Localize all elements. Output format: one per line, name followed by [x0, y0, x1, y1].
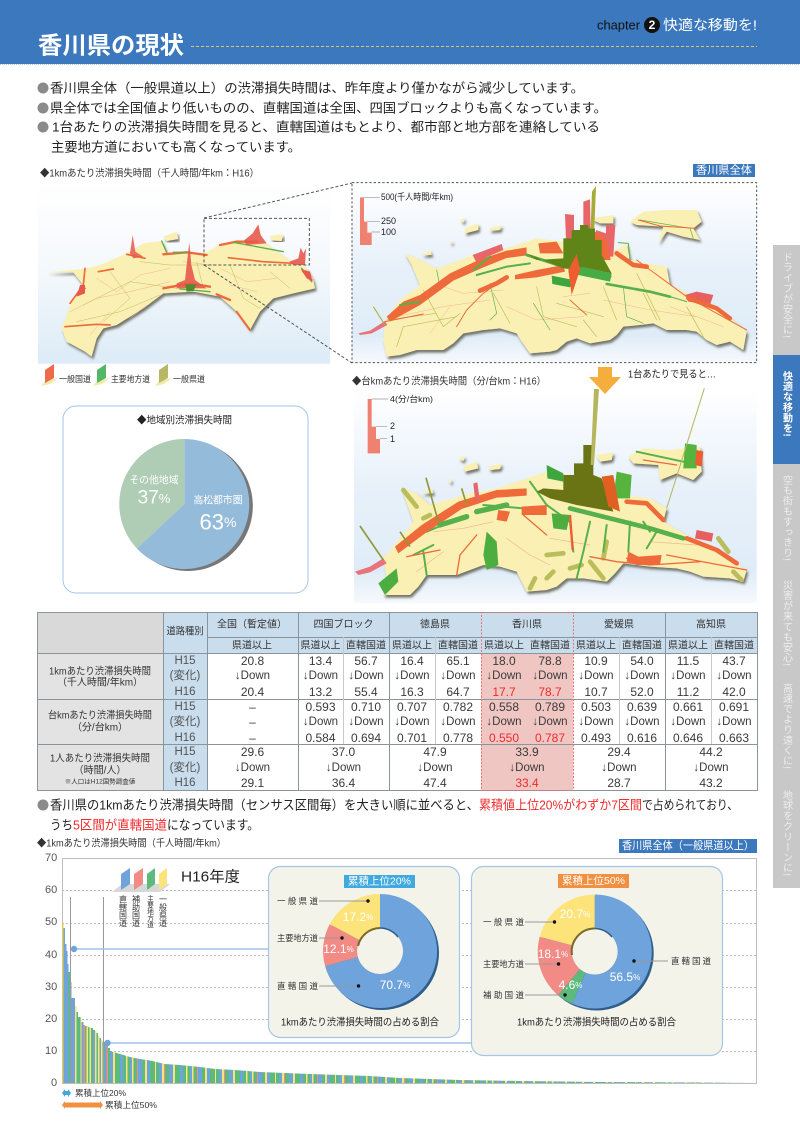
values per km: 13.4 [309, 654, 333, 668]
values per km: 11.5 [677, 654, 700, 668]
row headers: （分/台km） [72, 720, 128, 734]
column headers: 県道以上 [668, 638, 708, 652]
axis labels: 60 [45, 884, 57, 896]
donut chart: 20.7% [560, 907, 590, 921]
scale labels: vehicle map: 2 [390, 421, 395, 431]
bar chart [45, 852, 756, 1089]
column headers: 直轄国道 [714, 638, 754, 652]
axis labels: 70 [45, 852, 57, 864]
tab labels [780, 252, 792, 876]
intro bullet text [38, 80, 607, 154]
map heading: vehicle km: ◆台kmあたり渋滞損失時間（分/台km：H16） [352, 374, 546, 388]
fiscal year label: H16年度 [181, 868, 240, 886]
donut labels: 主要地方道 [277, 933, 318, 943]
donut chart: 56.5% [610, 970, 640, 984]
leader: top 50% [104, 1040, 471, 1046]
column headers: 直轄国道 [530, 638, 570, 652]
title: 香川県の現状 [38, 32, 184, 60]
column headers: 徳島県 [420, 618, 450, 630]
pie chart: その他地域 [130, 474, 178, 486]
range marker: top 50%: 累積上位50% [105, 1100, 157, 1110]
tab labels: 空も街もすっきり! [780, 475, 792, 561]
side navigation tabs [773, 245, 800, 888]
values per vehicle km: ↓Down [624, 716, 660, 728]
tab labels: 高速でより遠くに! [780, 682, 792, 769]
values per vehicle km: 0.616 [627, 731, 657, 745]
donut labels: 主要地方道 [483, 959, 524, 969]
ranking summary text: うち [50, 818, 73, 832]
column headers: 直轄国道 [438, 638, 478, 652]
year labels: H16 [174, 777, 196, 789]
donut chart: 12.1% [323, 942, 354, 956]
values per km: ↓Down [624, 670, 660, 682]
year labels: H15 [174, 701, 196, 713]
chart heading: ◆1kmあたり渋滞損失時間（千人時間/年km） [37, 836, 226, 850]
values per km: 20.8 [241, 654, 265, 668]
arrow: down [589, 367, 621, 394]
values per vehicle km: ↓Down [532, 716, 568, 728]
column headers: 愛媛県 [604, 618, 634, 630]
values per vehicle km: 0.707 [397, 700, 427, 714]
values per km: 16.4 [400, 654, 424, 668]
column headers: 四国ブロック [314, 618, 374, 630]
legend: road types: 一般県道 [173, 374, 205, 384]
axis labels: 30 [45, 981, 57, 993]
values per person: 44.2 [699, 745, 723, 759]
values per vehicle km: 0.584 [305, 731, 336, 745]
legend: H16 road classes: 補助国道 [132, 894, 140, 928]
row headers: （時間/人） [74, 764, 126, 776]
panel: regional pie [63, 406, 308, 593]
donut chart: 4.6% [559, 978, 582, 992]
year labels: (変化) [170, 669, 200, 682]
intro bullet text: 県全体では全国値より低いものの、直轄国道は全国、四国ブロックよりも高くなっています。 [50, 100, 607, 116]
axis labels [45, 852, 57, 1089]
values per vehicle km: ↓Down [716, 716, 752, 728]
values per vehicle km: 0.691 [719, 700, 749, 714]
leader: top 20% [71, 946, 268, 952]
values per km: 56.7 [354, 654, 378, 668]
values per person: ↓Down [601, 762, 637, 774]
chapter label: chapter [597, 18, 641, 32]
values per km: 17.7 [492, 685, 516, 699]
donut labels: 補 助 国 道 [483, 990, 524, 1000]
badge: top 50%: 累積上位50% [562, 874, 625, 887]
column headers: 直轄国道 [346, 638, 386, 652]
column headers: 県道以上 [232, 638, 272, 652]
column headers: 県道以上 [484, 638, 524, 652]
donut chart [323, 894, 439, 1010]
column headers: 全国（暫定値） [217, 618, 287, 630]
axis labels: 20 [45, 1013, 57, 1025]
intro bullet text: 1台あたりの渋滞損失時間を見ると、直轄国道はもとより、都市部と地方部を連絡している [52, 120, 600, 134]
scale bar [360, 197, 372, 245]
map: Kagawa per vehicle km [354, 388, 757, 603]
values per km: ↓Down [532, 670, 568, 682]
donut labels: 直 轄 国 道 [277, 981, 318, 991]
values per km: 78.7 [538, 685, 562, 699]
donut caption: 1kmあたり渋滞損失時間の占める割合 [517, 1016, 676, 1028]
year labels: (変化) [170, 715, 200, 728]
legend: road types: 一般国道 [59, 374, 91, 384]
axis labels: 0 [51, 1077, 57, 1089]
donut chart: 17.2% [343, 910, 373, 924]
pie chart: 高松都市圏 [194, 494, 242, 506]
ranking summary text: 累積値上位20%がわずか7区間 [479, 798, 642, 812]
values per person [235, 745, 729, 790]
scale labels: vehicle map: 4(分/台km) [390, 394, 433, 404]
column headers: 直轄国道 [622, 638, 662, 652]
values per person: ↓Down [693, 762, 729, 774]
bars: tallest sections [62, 923, 110, 1083]
header band [0, 0, 800, 64]
badge: top 20%: 累積上位20% [348, 874, 411, 888]
values per person: ↓Down [326, 762, 361, 774]
column headers: 県道以上 [392, 638, 432, 652]
pie chart [119, 439, 253, 571]
values per km: 10.7 [584, 685, 608, 699]
year labels: (変化) [170, 761, 200, 774]
values per person: 47.9 [423, 745, 447, 759]
values per km: 20.4 [241, 685, 265, 699]
badge: prefecture: 香川県全体 [696, 162, 752, 176]
donut chart [538, 894, 654, 1010]
values per km: 54.0 [630, 654, 654, 668]
chapter label: 2 [649, 18, 656, 32]
values per vehicle km: 0.789 [535, 700, 565, 714]
donut labels [483, 917, 711, 1000]
row headers [48, 664, 152, 786]
donut chart: 70.7% [380, 978, 410, 992]
tab labels: 災害が来ても安心! [780, 580, 792, 666]
values per person: ↓Down [417, 762, 453, 774]
values per vehicle km: 0.661 [673, 700, 703, 714]
values per km: ↓Down [348, 670, 384, 682]
values per person: ↓Down [235, 762, 270, 774]
ranking summary text: 香川県の1kmあたり渋滞損失時間（センサス区間毎）を大きい順に並べると、 [50, 798, 479, 812]
values per person: 28.7 [607, 776, 631, 790]
values per person: 33.9 [515, 745, 539, 759]
map: Shikoku overview [38, 183, 330, 364]
donut caption: 1kmあたり渋滞損失時間の占める割合 [281, 1016, 439, 1028]
values per vehicle km: ↓Down [670, 716, 706, 728]
legend: H16 road classes: 主要地方道 [146, 894, 154, 929]
column headers [166, 618, 754, 652]
scale labels: vehicle map [390, 394, 433, 444]
values per person: 43.2 [699, 776, 723, 790]
active tab [773, 355, 800, 464]
values per vehicle km: ↓Down [348, 716, 384, 728]
row headers: （千人時間/年km） [57, 676, 143, 688]
badge: chart scope: 香川県全体（一般県道以上） [622, 838, 754, 852]
year labels [170, 655, 200, 789]
axis labels: 40 [45, 949, 57, 961]
values per vehicle km: ↓Down [394, 716, 430, 728]
values per km: 10.9 [584, 654, 608, 668]
row headers: 1人あたり渋滞損失時間 [50, 752, 150, 764]
donut chart: 18.1% [538, 947, 568, 961]
tab labels: ドライブが安全に! [780, 252, 792, 338]
zoom connector lines [204, 183, 352, 363]
values per km: 43.7 [722, 654, 746, 668]
values per km: 65.1 [446, 654, 470, 668]
ranking summary text: 5区間が直轄国道 [73, 818, 167, 832]
values per km: 18.0 [492, 654, 516, 668]
bars: long tail [110, 1051, 756, 1083]
range marker: top 50% [62, 1100, 157, 1110]
values per vehicle km: 0.593 [305, 700, 336, 714]
pie chart: 37% [138, 488, 171, 508]
values per vehicle km: ↓Down [486, 716, 522, 728]
values per km: 11.2 [677, 685, 700, 699]
column headers: 県道以上 [576, 638, 616, 652]
year labels: H15 [174, 746, 196, 758]
values per km: ↓Down [235, 670, 270, 682]
column headers: 高知県 [696, 618, 726, 630]
values per vehicle km: ↓Down [440, 716, 476, 728]
values per person: 29.4 [607, 745, 631, 759]
values per person: 33.4 [515, 776, 539, 790]
panel: top 20% donut [268, 866, 460, 1038]
values per vehicle km: 0.694 [351, 731, 381, 745]
values per vehicle km: 0.550 [489, 731, 519, 745]
values per vehicle km: 0.503 [581, 700, 611, 714]
intro bullet text: 主要地方道においても高くなっています。 [51, 140, 301, 154]
values per vehicle km: – [249, 731, 256, 745]
row headers: ※人口はH12国勢調査値 [65, 776, 136, 786]
legend: H16 road classes [112, 868, 240, 929]
values per km: ↓Down [670, 670, 706, 682]
values per km [235, 654, 752, 699]
values per km: 42.0 [722, 685, 746, 699]
scale bar [368, 399, 380, 453]
legend: H16 road classes: 直轄国道 [118, 894, 128, 928]
ranking summary text: になっています。 [167, 818, 259, 832]
scale labels: km map: 250 [381, 216, 396, 226]
values per km: 16.3 [400, 685, 424, 699]
values per vehicle km: 0.646 [673, 731, 703, 745]
pie heading: ◆地域別渋滞損失時間 [137, 414, 232, 426]
arrow caption: 1台あたりで見ると… [628, 368, 716, 380]
row headers: 1kmあたり渋滞損失時間 [49, 664, 151, 678]
values per km: ↓Down [716, 670, 752, 682]
column headers: 県道以上 [300, 638, 340, 652]
column headers: 香川県 [512, 618, 542, 630]
values per vehicle km: 0.558 [489, 700, 519, 714]
axis labels: 10 [45, 1045, 57, 1057]
values per person: 37.0 [332, 745, 356, 759]
values per km: 55.4 [354, 685, 378, 699]
scale labels: km map: 500(千人時間/年km) [381, 191, 453, 202]
scale labels: km map: 100 [381, 227, 396, 237]
values per vehicle km: 0.778 [443, 731, 473, 745]
values per vehicle km: ↓Down [578, 716, 614, 728]
tab labels: 地球をクリーンに! [780, 789, 792, 876]
values per km: ↓Down [578, 670, 614, 682]
column headers: 道路種別 [166, 624, 204, 638]
donut labels [277, 896, 370, 991]
ranking summary text: で占められており、 [642, 798, 738, 812]
values per vehicle km: 0.710 [351, 700, 381, 714]
legend: road types: 主要地方道 [111, 374, 150, 384]
year labels: H15 [174, 655, 196, 667]
panel: top 50% donut [472, 866, 722, 1056]
values per km: ↓Down [303, 670, 338, 682]
values per vehicle km: – [249, 700, 256, 714]
values per vehicle km: 0.663 [719, 731, 749, 745]
values per vehicle km: 0.782 [443, 700, 473, 714]
tab labels: 快適な移動を! [780, 370, 792, 437]
values per km: 13.2 [309, 685, 333, 699]
values per km: ↓Down [486, 670, 522, 682]
values per vehicle km: 0.639 [627, 700, 657, 714]
values per vehicle km: ↓Down [303, 716, 338, 728]
scale labels: vehicle map: 1 [390, 434, 395, 444]
map: Kagawa per km [352, 183, 757, 363]
row headers: 台kmあたり渋滞損失時間 [48, 708, 152, 722]
ranking summary text [38, 798, 738, 832]
year labels: H16 [174, 732, 196, 744]
values per vehicle km: 0.493 [581, 731, 611, 745]
values per km: ↓Down [394, 670, 430, 682]
legend: H16 road classes: 一般県道 [158, 895, 168, 928]
values per person: 47.4 [423, 776, 447, 790]
values per vehicle km [249, 700, 752, 745]
values per km: 64.7 [446, 685, 470, 699]
map heading: 1km: ◆1kmあたり渋滞損失時間（千人時間/年km：H16） [40, 166, 259, 180]
range marker: top 20%: 累積上位20% [75, 1088, 126, 1098]
scale labels: km map [381, 191, 453, 237]
values per km: 78.8 [538, 654, 562, 668]
data table [37, 612, 758, 790]
donut labels: 一 般 県 道 [483, 917, 524, 927]
values per person: 29.1 [241, 776, 265, 790]
intro bullet text: 香川県全体（一般県道以上）の渋滞損失時間は、昨年度より僅かながら減少しています。 [50, 80, 584, 96]
chapter label [597, 17, 757, 33]
values per person: ↓Down [509, 762, 545, 774]
axis labels: 50 [45, 916, 57, 928]
donut labels: 直 轄 国 道 [671, 956, 711, 966]
chapter label: 快適な移動を! [663, 17, 757, 33]
values per km: 52.0 [630, 685, 654, 699]
values per person: 36.4 [332, 776, 356, 790]
legend: road types [41, 364, 205, 386]
values per km: ↓Down [440, 670, 476, 682]
values per vehicle km: 0.701 [397, 731, 427, 745]
year labels: H16 [174, 686, 196, 698]
values per vehicle km: – [249, 715, 256, 729]
pie chart: 63% [200, 510, 236, 534]
donut labels: 一 般 県 道 [277, 896, 318, 906]
values per person: 29.6 [241, 745, 265, 759]
values per vehicle km: 0.787 [535, 731, 565, 745]
